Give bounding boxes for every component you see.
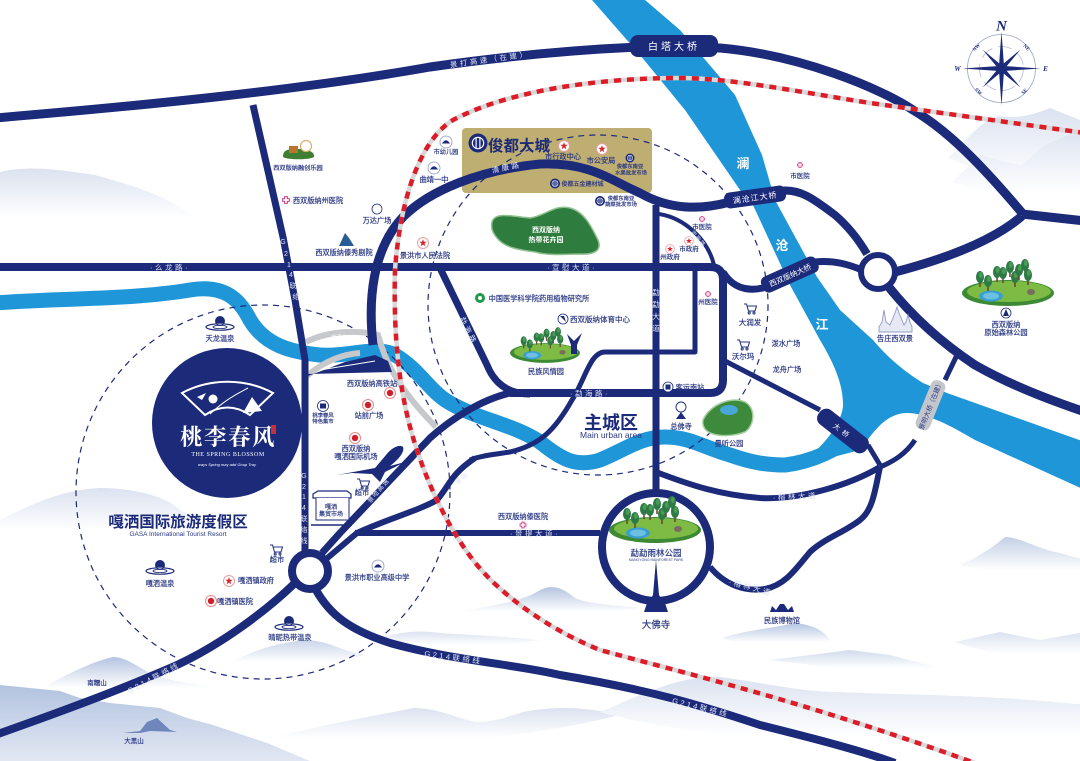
main urban area heading [580, 412, 642, 440]
east POIs: 西双版纳 [992, 320, 1020, 329]
central POIs: 中国医学科学院药用植物研究所 [489, 294, 589, 303]
compass rose: NW [972, 43, 982, 53]
Jundu Dacheng brand: 俊都大城 [488, 136, 551, 155]
road labels [125, 49, 823, 719]
east POIs: 龙舟广场 [773, 365, 801, 374]
road labels: G [280, 239, 286, 246]
road labels: G214联络线 [671, 695, 730, 719]
road labels: G214联络线 [125, 659, 182, 695]
Jundu Dacheng brand: 俊都东南亚 [608, 194, 635, 202]
tropical flower garden: 热带花卉园 [528, 235, 564, 244]
central POIs: 州政府 [660, 252, 680, 261]
Jundu Dacheng brand: 市行政中心 [545, 152, 581, 161]
central POIs: 市政府 [679, 244, 699, 253]
brand logo: The Spring Blossom [152, 348, 302, 498]
road labels: 2 [284, 251, 288, 258]
Jundu Dacheng brand: 俊都五金建材城 [561, 180, 604, 188]
river: Lancang [0, 0, 1080, 490]
east POIs: 沃尔玛 [732, 351, 755, 361]
road labels: 市政路 [689, 229, 708, 249]
central POIs: 客运南站 [676, 383, 704, 392]
brand logo: The Spring Blossom: THE SPRING BLOSSOM [191, 452, 265, 458]
bridges: 西双版纳大桥 [767, 261, 813, 289]
road labels: 景哈 [453, 470, 470, 486]
bridges: 白塔大桥 [648, 40, 700, 53]
main urban area heading: 主城区 [584, 412, 638, 433]
east POIs: 泼水广场 [772, 339, 800, 348]
north-west POIs: 西双版纳融创乐园 [273, 164, 323, 172]
resort POIs: 超市 [270, 555, 284, 564]
north-west POIs: 市幼儿园 [434, 148, 458, 156]
road labels: 景哈高速 [365, 476, 391, 505]
resort POIs: 天龙温泉 [206, 334, 234, 343]
north-west POIs: 西双版纳傣秀剧院 [315, 248, 373, 257]
compass rose: N [995, 18, 1008, 34]
railway station and airport: 桃李春风 [312, 411, 334, 419]
river: Lancang: 江 [815, 317, 829, 332]
railway station and airport: 超市 [355, 488, 369, 497]
grey overpass roads [306, 332, 436, 427]
road labels: 景打高速（在建） [449, 49, 530, 70]
railway station and airport: 西双版纳高铁站 [347, 379, 397, 388]
road labels: 络 [292, 292, 300, 301]
tourist resort heading: 嘎洒国际旅游度假区 [108, 512, 248, 531]
central POIs: 市医院 [790, 171, 810, 180]
dashed radius circles [76, 135, 768, 679]
river: Lancang: 澜 [736, 156, 750, 171]
railway station and airport: 嘎洒 [325, 503, 337, 511]
compass rose: SE [1021, 88, 1030, 96]
road labels: G [301, 473, 307, 480]
bridges: 景明大桥（在建） [917, 379, 944, 431]
north-west POIs: 西双版纳州医院 [293, 196, 343, 205]
north-west POIs: 万达广场 [363, 216, 391, 225]
tourist resort heading [108, 512, 248, 538]
road labels: 道 [652, 323, 660, 333]
bridges [630, 35, 947, 457]
railway station and airport [308, 355, 405, 525]
Jundu Dacheng brand: 蔬菜批发市场 [605, 200, 637, 208]
east POIs: 大润发 [739, 317, 762, 327]
road labels: 4 [289, 272, 293, 279]
compass rose: NE [1022, 44, 1031, 53]
north-west POIs [273, 136, 458, 260]
brand logo: The Spring Blossom: 桃李春风 [180, 420, 276, 452]
compass rose [954, 18, 1048, 106]
grey overpass roads: 嘎洒中 [331, 334, 347, 341]
central POIs: 州医院 [698, 297, 718, 306]
rail line [395, 78, 1080, 761]
compass rose: E [1042, 65, 1048, 73]
resort POIs: 大黑山 [124, 736, 144, 745]
central POIs: 市医院 [692, 222, 712, 231]
Manting park [703, 400, 753, 448]
Menghai rainforest park: 大佛寺 [642, 619, 671, 631]
road labels: ·宣慰大道· [547, 262, 597, 272]
resort POIs: 嘎洒镇医院 [217, 597, 253, 606]
roundabouts [292, 255, 895, 601]
road labels: 4 [302, 505, 306, 512]
road labels: 勐 [652, 287, 660, 297]
east POIs: 告庄西双景 [877, 334, 913, 343]
east POIs: 总佛寺 [670, 422, 692, 431]
central POIs: 西双版纳体育中心 [570, 314, 630, 324]
road labels: ·勐海路· [570, 388, 610, 398]
compass rose: SW [973, 88, 982, 97]
road labels: 清康路 [491, 159, 522, 175]
railway station and airport: 集贸市场 [319, 510, 343, 518]
tropical flower garden [492, 207, 599, 254]
road labels: ·榕林大道· [773, 490, 823, 502]
tropical flower garden: 西双版纳 [532, 225, 560, 234]
resort POIs: 嘎洒镇政府 [238, 576, 274, 585]
gold panel: Jundu Dacheng [462, 128, 652, 193]
resort POIs [87, 316, 312, 745]
Jundu Dacheng brand [468, 134, 647, 208]
brand logo: The Spring Blossom: ways Spring may add Goup Tray [198, 462, 257, 467]
road labels: ·榕林大道 [728, 576, 774, 598]
Menghai rainforest park [609, 496, 701, 631]
main urban area heading: Main urban area [580, 430, 642, 440]
tourist resort heading: GASA International Tourist Resort [129, 531, 227, 538]
Jundu Dacheng brand: 市公安局 [587, 156, 615, 165]
road labels: ·么龙路· [150, 262, 190, 272]
resort POIs: 晴昵热带温泉 [268, 633, 312, 642]
central POIs: 民族风情园 [528, 367, 564, 376]
road labels: G214联络线 [424, 648, 483, 666]
north-west POIs: 曲靖一中 [420, 175, 448, 184]
bridges: 大桥 [831, 421, 854, 442]
road labels: 1 [302, 494, 306, 501]
railway station and airport: 西双版纳 [342, 444, 370, 453]
Jundu Dacheng brand: 水果批发市场 [615, 168, 647, 176]
east POIs: 原始森林公园 [984, 328, 1028, 337]
railway station and airport: 特色集市 [312, 417, 334, 425]
Menghai rainforest park: 勐勐雨林公园 [630, 548, 682, 558]
road labels: 联 [300, 514, 308, 523]
south POIs: 景洪市职业高级中学 [345, 573, 409, 582]
road labels: 线 [300, 536, 308, 545]
Menghai rainforest park: MANGYONG RAINFOREST PARK [629, 558, 684, 562]
river: Lancang: 沧 [775, 238, 789, 253]
road labels: 2 [302, 484, 306, 491]
south POIs: 西双版纳傣医院 [498, 512, 548, 521]
resort POIs: 南糯山 [87, 678, 107, 687]
railway station and airport: 站前广场 [355, 411, 383, 420]
Jundu Dacheng brand: 俊都东南亚 [617, 162, 644, 170]
road labels: ·景提大道· [510, 528, 560, 538]
east POIs [670, 259, 1054, 431]
compass rose: W [954, 65, 961, 73]
road labels: 勐海路 [458, 315, 480, 346]
south POIs [345, 512, 800, 625]
resort POIs: 嘎洒温泉 [146, 579, 174, 588]
Manting park: 曼听公园 [715, 439, 743, 448]
road labels: 1 [287, 262, 291, 269]
railway station and airport: 嘎洒国际机场 [334, 452, 378, 461]
road labels: 络 [300, 525, 308, 534]
road labels: 联 [290, 281, 296, 290]
bridges: 澜沧江大桥 [732, 189, 778, 206]
north-west POIs: 景洪市人民法院 [400, 251, 450, 260]
central POIs [475, 162, 810, 392]
road labels: 大 [652, 311, 660, 321]
south POIs: 民族博物馆 [764, 616, 800, 625]
road labels: 勐 [652, 299, 660, 309]
